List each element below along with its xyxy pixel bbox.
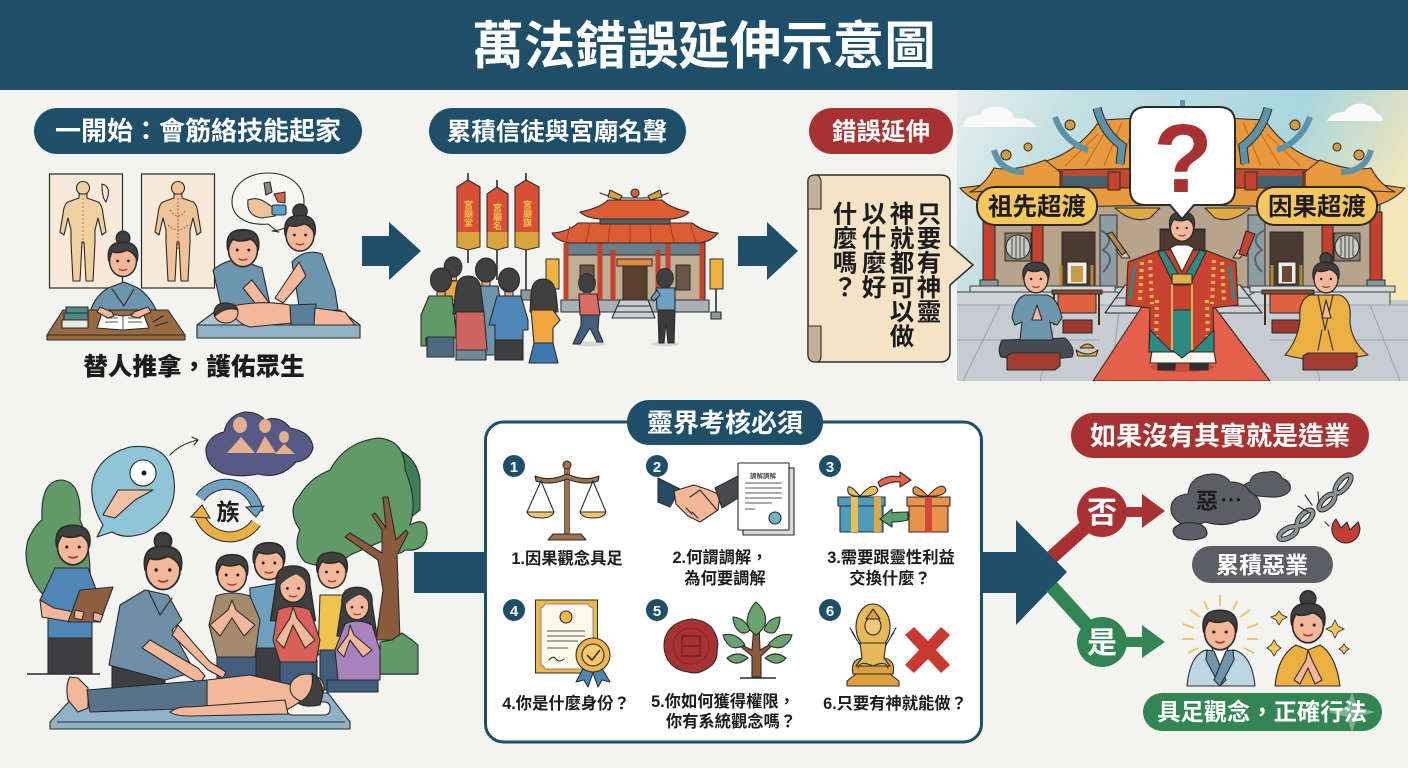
left altar table (1052, 290, 1102, 325)
decision branch: no (1052, 487, 1165, 557)
scroll: wrong belief quote (808, 175, 973, 362)
arrow: bubble to ancestors (170, 437, 198, 455)
label 2: 為何要調解 (684, 569, 766, 588)
panel heading (627, 400, 823, 445)
title: 萬法錯誤延伸示意圖 (472, 17, 936, 75)
connector arrow: panel to decision (981, 520, 1067, 625)
label: accumulated bad karma (1192, 546, 1333, 583)
decision branch: yes: 是 (1087, 627, 1117, 660)
icon: meridian poster left (50, 174, 122, 288)
item 2: mediation handshake and document: 調解調解 (750, 471, 776, 480)
temple steps and floor (950, 285, 1408, 381)
altars and offerings (1061, 262, 1301, 288)
label 5: 5.你如何獲得權限， (651, 692, 795, 711)
panel heading: 靈界考核必須 (647, 408, 803, 438)
dark clouds of evil: … (1220, 483, 1242, 515)
red carpet (1093, 305, 1270, 381)
label 3: 交換什麼？ (849, 569, 931, 588)
temple building (546, 189, 723, 319)
item 5: wax seal and tree of authority (646, 599, 792, 678)
dark clouds of evil (1171, 472, 1290, 540)
robed priest (1107, 212, 1255, 372)
illustration: temple and followers (421, 173, 723, 363)
walking visitors (573, 268, 679, 346)
speech bubble: question mark (1130, 104, 1235, 219)
section heading: starting with meridian skills (34, 108, 362, 154)
illustration: massage and meridian practice (47, 173, 360, 340)
reader with book (40, 525, 113, 674)
header banner (0, 0, 1408, 90)
section heading: error extension: 錯誤延伸 (832, 118, 930, 146)
person studying at desk (47, 231, 185, 340)
sparkles (1267, 611, 1349, 656)
item 3: exchanging gifts (819, 455, 950, 532)
label: karma salvation (1257, 187, 1377, 225)
clouds (963, 104, 1383, 127)
scroll: wrong belief quote: 以什麼好 (858, 201, 886, 299)
dark clouds of evil: 惡 (1196, 489, 1218, 514)
banners (457, 173, 539, 300)
scroll: wrong belief quote: 神就都可以做 (886, 201, 914, 348)
item 4: certificate of identity: 4 (510, 603, 519, 620)
label 5: 你有系統觀念嗎？ (666, 712, 796, 731)
banners: 宮廟堂 (463, 199, 473, 227)
right worshipper kneeling (1272, 253, 1368, 370)
item 2: mediation handshake and document: 2 (653, 459, 661, 476)
decision branch: no: 否 (1087, 497, 1117, 530)
item 3: exchanging gifts: 3 (826, 459, 834, 476)
decision branch: yes (1052, 587, 1165, 667)
connector arrow: left into panel (414, 552, 486, 593)
item 6: deity with cross mark (819, 599, 950, 686)
item 6: deity with cross mark: 6 (826, 603, 834, 620)
temple building (960, 100, 1405, 290)
heading: without substance it is karma: 如果沒有其實就是造業 (1090, 421, 1350, 451)
section heading: starting with meridian skills: 一開始：會筋絡技能起家 (55, 116, 341, 146)
illustration: healer, family and spirits (26, 412, 427, 729)
icon: meridian poster right (142, 174, 214, 288)
label: complete understanding, correct practice (1143, 692, 1382, 733)
item 2: mediation handshake and document (646, 455, 794, 535)
speech bubble: question mark: ? (1153, 104, 1213, 213)
item 4: certificate of identity (503, 599, 610, 687)
arrow: step 2 to step 3 (738, 222, 798, 280)
people with correct practice (1182, 591, 1349, 686)
label: accumulated bad karma: 累積惡業 (1216, 552, 1308, 578)
mat with lying patient (50, 673, 350, 729)
section heading: error extension (809, 108, 953, 154)
cloud: ancestors (206, 412, 313, 476)
tree (293, 438, 427, 674)
item 1: scales of karma: 1 (510, 459, 518, 476)
banners: 宮廟旗 (522, 199, 532, 228)
cycle with clan character: 族 (216, 499, 240, 525)
ground line (27, 673, 418, 675)
family group praying (209, 543, 380, 692)
right altar table (1262, 290, 1314, 325)
man in light robe (1187, 610, 1255, 686)
label: ancestor salvation: 祖先超渡 (988, 193, 1086, 221)
label 1: 1.因果觀念具足 (511, 549, 623, 568)
speech bubble: hand and eye (92, 446, 174, 537)
label 4: 4.你是什麼身份？ (502, 694, 630, 713)
label 2: 2.何謂調解， (672, 548, 768, 567)
label: complete understanding, correct practice: 具足觀念，正確行法 (1157, 698, 1367, 725)
scroll: wrong belief quote: 什麼嗎？ (830, 201, 857, 299)
label 3: 3.需要跟靈性利益 (827, 548, 955, 567)
banners: 宮廟名 (492, 202, 502, 231)
label 6: 6.只要有神就能做？ (823, 694, 967, 713)
rays of light (1182, 595, 1258, 653)
woman in yellow robe praying (1275, 591, 1340, 686)
label: ancestor salvation (977, 187, 1097, 225)
temple ritual scene (950, 90, 1408, 381)
healer leaning over patient (109, 533, 226, 690)
left worshipper kneeling (999, 262, 1098, 370)
crowd of followers (421, 257, 560, 363)
panel: spiritual exam requirements (486, 400, 982, 742)
arrow: step 1 to step 2 (362, 222, 421, 280)
item 1: scales of karma (503, 455, 606, 540)
section heading: accumulating followers (429, 108, 686, 154)
mat and patient receiving massage (197, 204, 360, 338)
scroll: wrong belief quote: 只要有神靈 (914, 201, 941, 324)
label: karma salvation: 因果超渡 (1268, 193, 1366, 221)
bush behind reader (26, 480, 90, 597)
section heading: accumulating followers: 累積信徒與宮廟名聲 (447, 118, 667, 146)
cycle with clan character (191, 484, 264, 537)
item 5: wax seal and tree of authority: 5 (653, 603, 661, 620)
heading: without substance it is karma (1071, 413, 1369, 458)
caption: massage blessing: 替人推拿，護佑眾生 (83, 352, 305, 381)
thought bubble: anatomy (232, 173, 304, 232)
broken chain (1277, 473, 1360, 543)
